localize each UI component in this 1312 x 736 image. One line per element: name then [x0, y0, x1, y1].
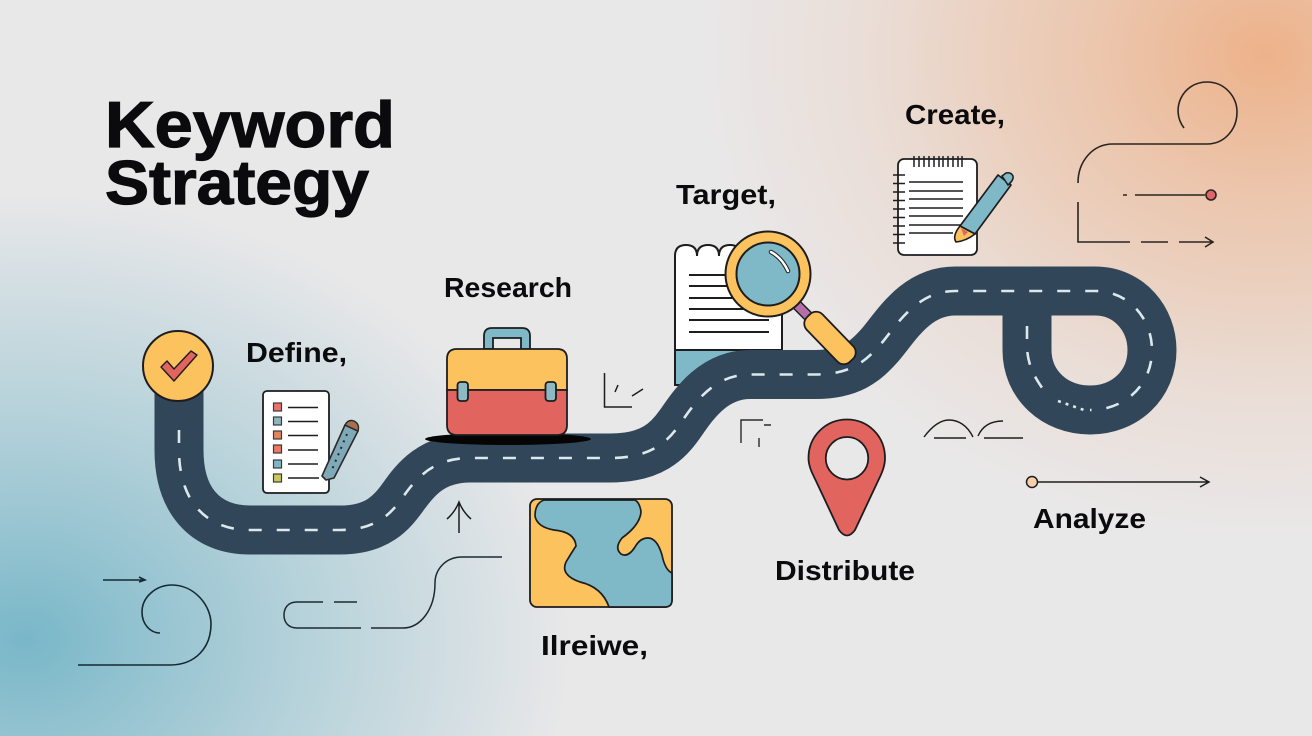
- icon: checklist with pen: [263, 391, 358, 493]
- label: Distribute: Distribute: [775, 555, 915, 586]
- winding road: [179, 291, 1152, 530]
- label: Target: Target,: [676, 179, 776, 210]
- title: Strategy: [105, 149, 370, 218]
- label: Create: Create,: [905, 99, 1005, 130]
- icon: target document: [675, 245, 782, 385]
- icon: briefcase: [425, 328, 591, 445]
- arrow: to analyze: [1026, 476, 1209, 488]
- label: Analyze: Analyze: [1033, 503, 1146, 534]
- corner marks near road: [604, 373, 643, 407]
- icon: map: [530, 499, 672, 607]
- decorative spiral line top right: [1078, 82, 1237, 247]
- arrow: up: [447, 502, 471, 533]
- title: Keyword: [105, 88, 395, 161]
- decorative spiral bottom left: [78, 577, 211, 665]
- title: [105, 88, 395, 218]
- icon: notepad with pen: [893, 156, 1013, 255]
- corner marks below road: [741, 420, 771, 447]
- briefcase shadow: [425, 433, 591, 445]
- label: Define: Define,: [246, 337, 347, 368]
- label: Ilreiwe: Ilreiwe,: [541, 630, 648, 661]
- road centre dashes: [179, 291, 1152, 530]
- dashed arrow: [1078, 202, 1213, 247]
- icon: check badge: [143, 331, 213, 401]
- decorative squiggle bottom centre: [284, 557, 502, 628]
- icon: location pin: [808, 420, 885, 536]
- red dot: [1206, 190, 1216, 200]
- arc marks: [924, 420, 1023, 438]
- label: Research: Research: [444, 272, 572, 303]
- icon: magnifying glass: [726, 232, 859, 368]
